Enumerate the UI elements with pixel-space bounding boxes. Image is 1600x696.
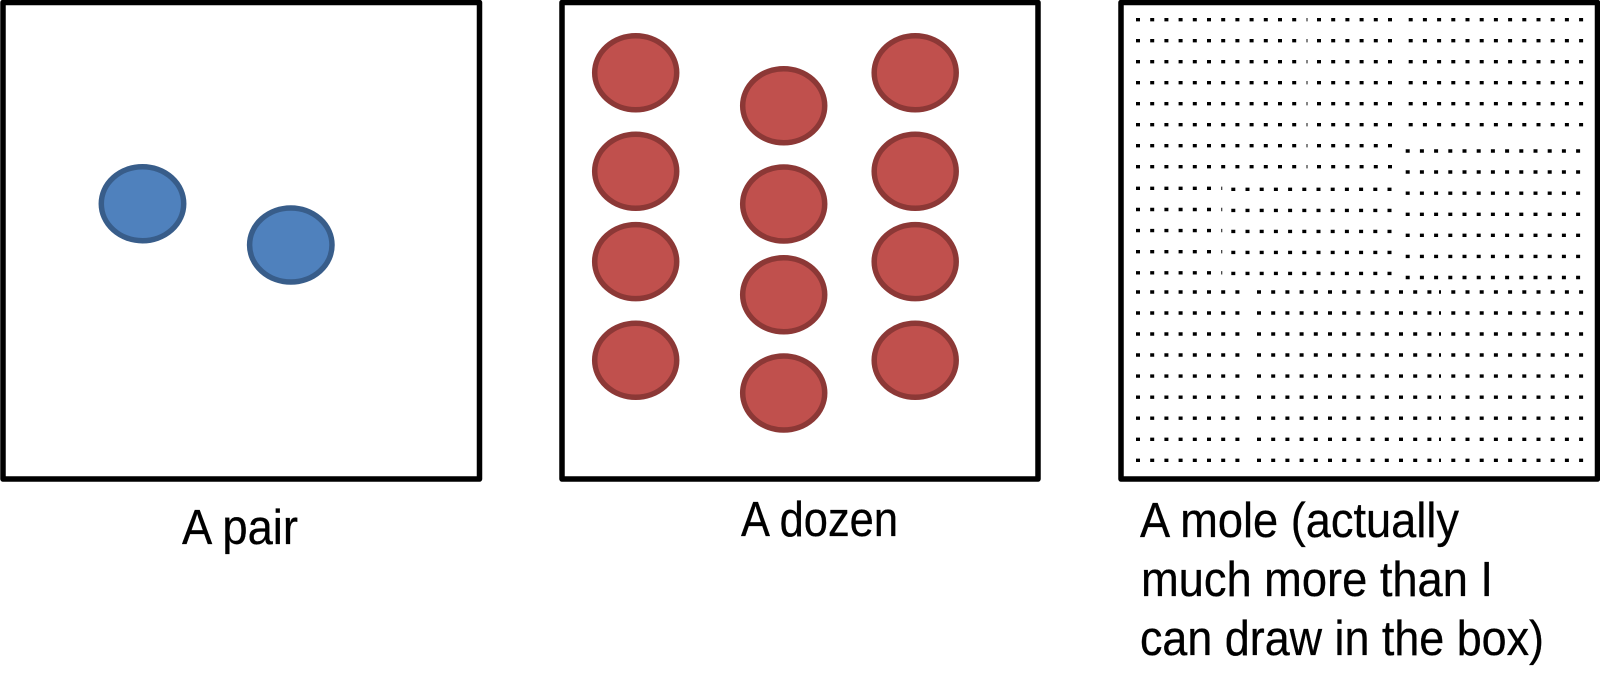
box: pair frame [3,2,480,479]
icon: blue circle right [250,208,332,282]
chart: clipped dot slivers lower seam [1439,290,1441,462]
panel: a dozen [562,2,1038,479]
caption line 3: can draw in the box) [1140,612,1544,666]
icon: blue circle left [101,167,184,241]
icon: twelve red circles [595,36,956,430]
panel: a pair [3,2,480,479]
caption: a mole [1140,494,1544,666]
caption line 1: A mole (actually [1140,494,1459,548]
caption line 2: much more than I [1141,553,1493,607]
chart: clipped dot slivers at block seams [1222,18,1307,274]
chart: dense grid of tiny dots [1136,20,1584,460]
caption: a dozen: A dozen [741,493,898,547]
box: mole frame [1121,2,1598,479]
caption: a pair: A pair [182,501,298,555]
panel: a mole [1121,2,1598,479]
box: dozen frame [562,2,1038,479]
